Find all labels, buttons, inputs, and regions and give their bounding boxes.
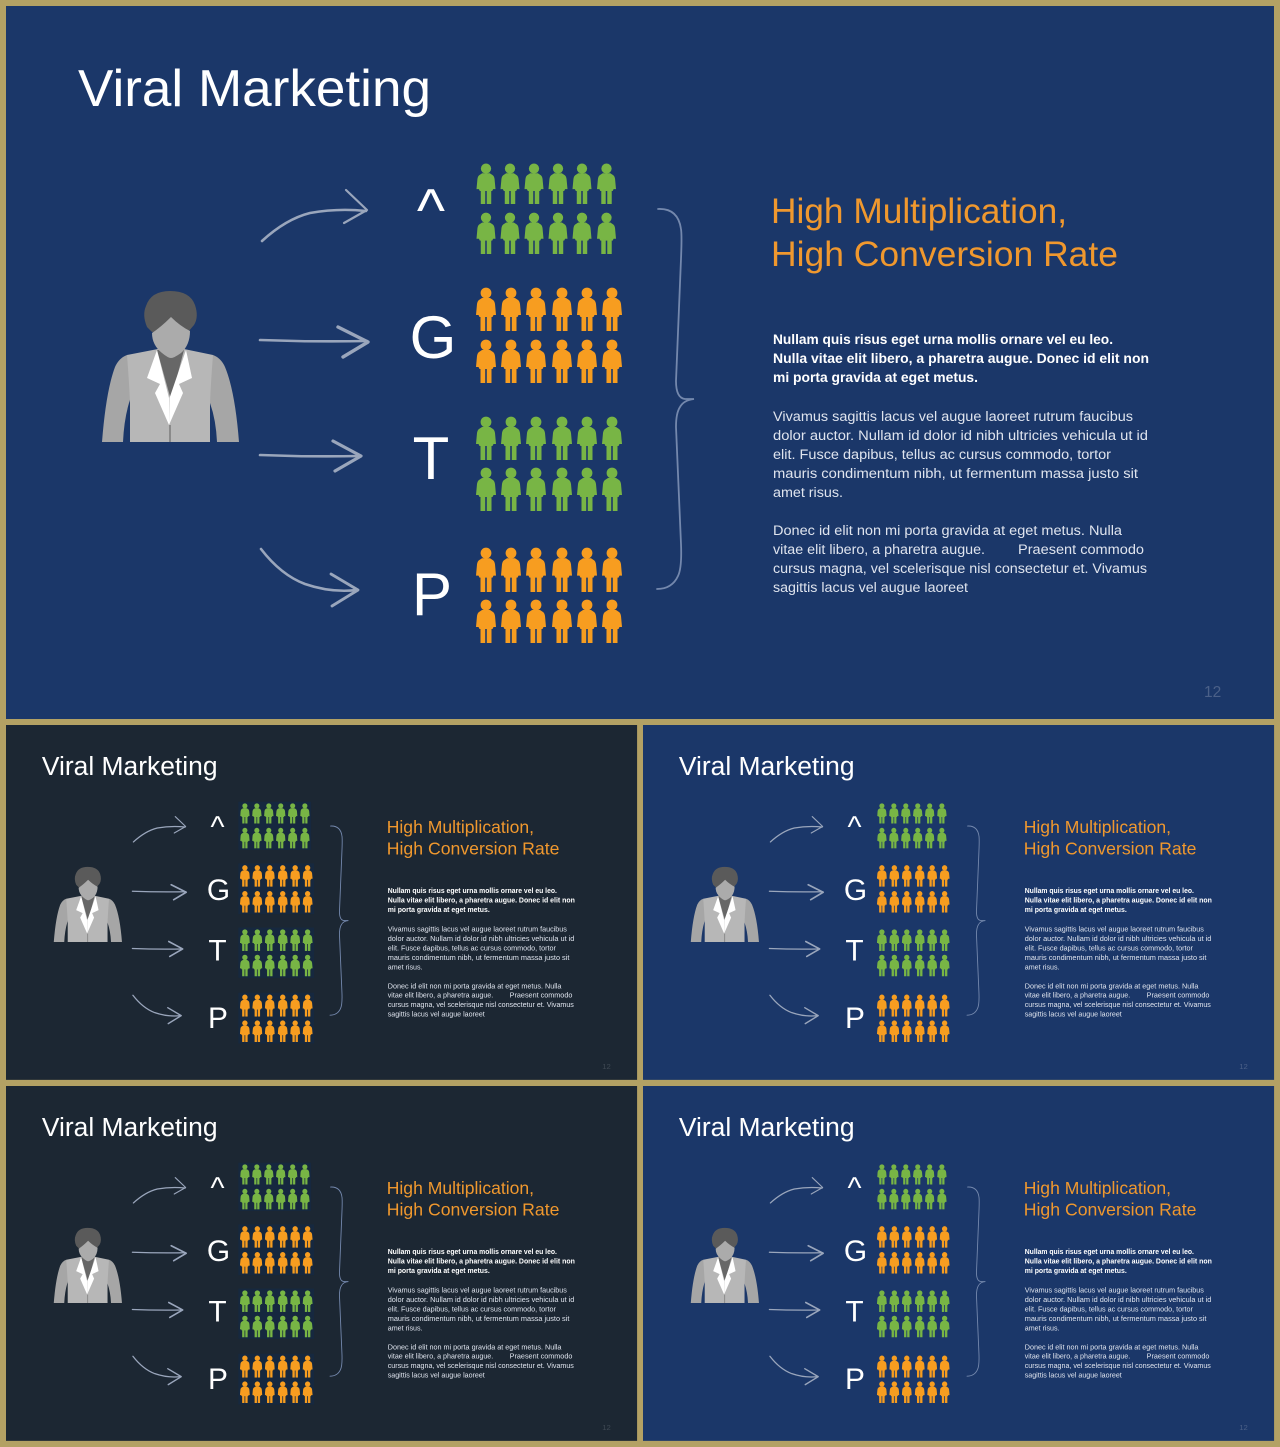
heading: High Conversion Rate bbox=[771, 235, 1118, 274]
letter: caret: ^ bbox=[417, 177, 445, 244]
heading bbox=[387, 817, 559, 858]
panel: dark slide bottom left bbox=[6, 1086, 637, 1441]
letter: G: G bbox=[844, 1235, 867, 1268]
heading: High Multiplication, bbox=[387, 1178, 534, 1198]
body paragraph 1: amet risus. bbox=[773, 485, 843, 501]
body paragraph 1: elit. Fusce dapibus, tellus ac cursus commodo, tortor bbox=[1025, 945, 1194, 952]
brace bbox=[967, 826, 985, 1015]
bold paragraph: mi porta gravida at eget metus. bbox=[1025, 1268, 1127, 1275]
pictogram group: P row bbox=[240, 1356, 313, 1403]
heading: High Multiplication, bbox=[771, 192, 1067, 231]
bold paragraph: Nulla vitae elit libero, a pharetra augue. Donec id elit non bbox=[388, 898, 575, 905]
bold paragraph: mi porta gravida at eget metus. bbox=[388, 1268, 490, 1275]
heading: High Conversion Rate bbox=[387, 838, 559, 858]
body paragraph 1: elit. Fusce dapibus, tellus ac cursus commodo, tortor bbox=[388, 1306, 557, 1313]
letter: T: T bbox=[845, 1295, 864, 1328]
bold paragraph bbox=[1025, 1249, 1212, 1275]
arrows from person to letters bbox=[769, 817, 823, 1024]
brace bbox=[330, 826, 348, 1015]
bold paragraph: Nulla vitae elit libero, a pharetra augue. Donec id elit non bbox=[1025, 1259, 1212, 1266]
bold paragraph: Nullam quis risus eget urna mollis ornare vel eu leo. bbox=[773, 332, 1113, 348]
icon: business person bbox=[691, 1228, 759, 1303]
pictogram group: P row bbox=[877, 1356, 950, 1403]
body paragraph 1: mauris condimentum nibh, ut fermentum massa justo sit bbox=[773, 466, 1138, 482]
bold paragraph: Nulla vitae elit libero, a pharetra augue. Donec id elit non bbox=[1025, 898, 1212, 905]
body paragraph 1: dolor auctor. Nullam id dolor id nibh ultricies vehicula ut id bbox=[1025, 936, 1211, 943]
pictogram group: G row bbox=[877, 1226, 950, 1274]
body paragraph 2: sagittis lacus vel augue laoreet bbox=[773, 580, 968, 596]
body paragraph 1: amet risus. bbox=[388, 964, 423, 971]
bold paragraph bbox=[388, 1249, 575, 1275]
title: Viral Marketing bbox=[78, 60, 431, 118]
bold paragraph bbox=[773, 332, 1149, 386]
pictogram group: T row bbox=[877, 1290, 950, 1337]
heading: High Multiplication, bbox=[1024, 1178, 1171, 1198]
panel: blue slide top right bbox=[643, 725, 1274, 1080]
icon: business person bbox=[691, 867, 759, 942]
body paragraph 1: Vivamus sagittis lacus vel augue laoreet rutrum faucibus bbox=[388, 927, 567, 934]
pictogram group: T row bbox=[240, 1290, 313, 1337]
arrows from person to letters bbox=[769, 1178, 823, 1385]
body paragraph 2: Donec id elit non mi porta gravida at eget metus. Nulla bbox=[1025, 983, 1199, 990]
pictogram group: T row bbox=[877, 929, 950, 976]
body paragraph 1: elit. Fusce dapibus, tellus ac cursus commodo, tortor bbox=[1025, 1306, 1194, 1313]
body paragraph 1 bbox=[388, 927, 574, 971]
pictogram group: G row bbox=[240, 1226, 313, 1274]
letter: G: G bbox=[207, 874, 230, 907]
title: Viral Marketing bbox=[42, 753, 218, 781]
heading: High Multiplication, bbox=[387, 817, 534, 837]
letter: P: P bbox=[208, 1002, 228, 1035]
bold paragraph: Nullam quis risus eget urna mollis ornare vel eu leo. bbox=[1025, 1249, 1194, 1256]
body paragraph 1: Vivamus sagittis lacus vel augue laoreet rutrum faucibus bbox=[1025, 927, 1204, 934]
page number: 12 bbox=[602, 1062, 611, 1071]
body paragraph 2: Praesent commodo bbox=[1147, 993, 1209, 1000]
body paragraph 2: sagittis lacus vel augue laoreet bbox=[388, 1012, 485, 1019]
body paragraph 2: Donec id elit non mi porta gravida at eget metus. Nulla bbox=[773, 523, 1122, 539]
body paragraph 2 bbox=[773, 523, 1147, 596]
body paragraph 2: sagittis lacus vel augue laoreet bbox=[1025, 1012, 1122, 1019]
body paragraph 1: Vivamus sagittis lacus vel augue laoreet rutrum faucibus bbox=[1025, 1288, 1204, 1295]
body paragraph 1: dolor auctor. Nullam id dolor id nibh ultricies vehicula ut id bbox=[1025, 1297, 1211, 1304]
body paragraph 2: vitae elit libero, a pharetra augue. bbox=[388, 1354, 493, 1361]
panel: blue slide bottom right bbox=[643, 1086, 1274, 1441]
arrows from person to letters bbox=[260, 190, 368, 606]
body paragraph 1 bbox=[773, 409, 1148, 501]
body paragraph 2: cursus magna, vel scelerisque nisl consectetur et. Vivamus bbox=[388, 1363, 574, 1370]
body paragraph 1: elit. Fusce dapibus, tellus ac cursus commodo, tortor bbox=[388, 945, 557, 952]
arrows from person to letters bbox=[132, 1178, 186, 1385]
body paragraph 2: cursus magna, vel scelerisque nisl consectetur et. Vivamus bbox=[1025, 1002, 1211, 1009]
body paragraph 1: Vivamus sagittis lacus vel augue laoreet rutrum faucibus bbox=[773, 409, 1133, 425]
bold paragraph: Nullam quis risus eget urna mollis ornare vel eu leo. bbox=[388, 888, 557, 895]
body paragraph 1: dolor auctor. Nullam id dolor id nibh ultricies vehicula ut id bbox=[388, 1297, 574, 1304]
heading bbox=[387, 1178, 559, 1219]
heading bbox=[771, 192, 1118, 274]
arrows from person to letters bbox=[132, 817, 186, 1024]
body paragraph 2: vitae elit libero, a pharetra augue. bbox=[773, 542, 985, 558]
letter: G: G bbox=[410, 304, 456, 371]
pictogram group: caret row bbox=[240, 1164, 310, 1209]
body paragraph 2: sagittis lacus vel augue laoreet bbox=[1025, 1373, 1122, 1380]
page number: 12 bbox=[1239, 1423, 1248, 1432]
pictogram group: P row bbox=[476, 548, 622, 643]
body paragraph 2 bbox=[388, 1344, 574, 1380]
body paragraph 2: cursus magna, vel scelerisque nisl consectetur et. Vivamus bbox=[388, 1002, 574, 1009]
letter: P: P bbox=[412, 561, 452, 628]
body paragraph 2 bbox=[1025, 1344, 1211, 1380]
bold paragraph: mi porta gravida at eget metus. bbox=[388, 907, 490, 914]
body paragraph 2: Donec id elit non mi porta gravida at eget metus. Nulla bbox=[1025, 1344, 1199, 1351]
heading: High Conversion Rate bbox=[387, 1199, 559, 1219]
body paragraph 2: Praesent commodo bbox=[510, 1354, 572, 1361]
letter: P: P bbox=[208, 1363, 228, 1396]
body paragraph 1: dolor auctor. Nullam id dolor id nibh ultricies vehicula ut id bbox=[773, 428, 1148, 444]
body paragraph 1: mauris condimentum nibh, ut fermentum massa justo sit bbox=[388, 1316, 569, 1323]
body paragraph 2: Praesent commodo bbox=[1018, 542, 1144, 558]
body paragraph 2: Donec id elit non mi porta gravida at eget metus. Nulla bbox=[388, 983, 562, 990]
letter: T: T bbox=[208, 1295, 227, 1328]
brace bbox=[330, 1187, 348, 1376]
body paragraph 2: vitae elit libero, a pharetra augue. bbox=[388, 993, 493, 1000]
pictogram group: T row bbox=[476, 417, 622, 511]
body paragraph 2 bbox=[1025, 983, 1211, 1019]
title: Viral Marketing bbox=[679, 753, 855, 781]
letter: T: T bbox=[208, 934, 227, 967]
icon: business person bbox=[102, 291, 239, 442]
pictogram group: G row bbox=[476, 288, 622, 383]
body paragraph 2: Praesent commodo bbox=[510, 993, 572, 1000]
bold paragraph: Nulla vitae elit libero, a pharetra augue. Donec id elit non bbox=[773, 351, 1149, 367]
page number: 12 bbox=[602, 1423, 611, 1432]
pictogram group: G row bbox=[240, 865, 313, 913]
icon: business person bbox=[54, 867, 122, 942]
pictogram group: caret row bbox=[877, 1164, 947, 1209]
bold paragraph: Nullam quis risus eget urna mollis ornare vel eu leo. bbox=[1025, 888, 1194, 895]
body paragraph 1: amet risus. bbox=[388, 1325, 423, 1332]
bold paragraph: Nulla vitae elit libero, a pharetra augue. Donec id elit non bbox=[388, 1259, 575, 1266]
page number: 12 bbox=[1239, 1062, 1248, 1071]
pictogram group: T row bbox=[240, 929, 313, 976]
panel: dark slide top left bbox=[6, 725, 637, 1080]
body paragraph 1: amet risus. bbox=[1025, 1325, 1060, 1332]
page number: 12 bbox=[1204, 684, 1221, 701]
body paragraph 1: Vivamus sagittis lacus vel augue laoreet rutrum faucibus bbox=[388, 1288, 567, 1295]
body paragraph 2: Donec id elit non mi porta gravida at eget metus. Nulla bbox=[388, 1344, 562, 1351]
body paragraph 1: amet risus. bbox=[1025, 964, 1060, 971]
letter: P: P bbox=[845, 1363, 865, 1396]
letter: P: P bbox=[845, 1002, 865, 1035]
letter: T: T bbox=[413, 425, 449, 492]
bold paragraph bbox=[388, 888, 575, 914]
letter: caret: ^ bbox=[848, 811, 862, 844]
body paragraph 1: dolor auctor. Nullam id dolor id nibh ultricies vehicula ut id bbox=[388, 936, 574, 943]
letter: T: T bbox=[845, 934, 864, 967]
body paragraph 2: vitae elit libero, a pharetra augue. bbox=[1025, 1354, 1130, 1361]
bold paragraph: Nullam quis risus eget urna mollis ornare vel eu leo. bbox=[388, 1249, 557, 1256]
brace bbox=[967, 1187, 985, 1376]
pictogram group: caret row bbox=[877, 803, 947, 848]
body paragraph 2: cursus magna, vel scelerisque nisl consectetur et. Vivamus bbox=[773, 561, 1147, 577]
bold paragraph bbox=[1025, 888, 1212, 914]
pictogram group: P row bbox=[877, 995, 950, 1042]
pictogram group: G row bbox=[877, 865, 950, 913]
body paragraph 1: mauris condimentum nibh, ut fermentum massa justo sit bbox=[388, 955, 569, 962]
letter: caret: ^ bbox=[211, 1172, 225, 1205]
body paragraph 1 bbox=[388, 1288, 574, 1332]
letter: G: G bbox=[844, 874, 867, 907]
bold paragraph: mi porta gravida at eget metus. bbox=[773, 370, 978, 386]
title: Viral Marketing bbox=[42, 1114, 218, 1142]
body paragraph 2: vitae elit libero, a pharetra augue. bbox=[1025, 993, 1130, 1000]
heading bbox=[1024, 817, 1196, 858]
body paragraph 2 bbox=[388, 983, 574, 1019]
letter: caret: ^ bbox=[211, 811, 225, 844]
body paragraph 1: mauris condimentum nibh, ut fermentum massa justo sit bbox=[1025, 1316, 1206, 1323]
heading: High Multiplication, bbox=[1024, 817, 1171, 837]
brace bbox=[657, 209, 694, 589]
title: Viral Marketing bbox=[679, 1114, 855, 1142]
bold paragraph: mi porta gravida at eget metus. bbox=[1025, 907, 1127, 914]
pictogram group: caret row bbox=[240, 803, 310, 848]
heading: High Conversion Rate bbox=[1024, 838, 1196, 858]
pictogram group: P row bbox=[240, 995, 313, 1042]
body paragraph 1 bbox=[1025, 1288, 1211, 1332]
body paragraph 2: Praesent commodo bbox=[1147, 1354, 1209, 1361]
heading: High Conversion Rate bbox=[1024, 1199, 1196, 1219]
body paragraph 2: cursus magna, vel scelerisque nisl consectetur et. Vivamus bbox=[1025, 1363, 1211, 1370]
heading bbox=[1024, 1178, 1196, 1219]
letter: caret: ^ bbox=[848, 1172, 862, 1205]
icon: business person bbox=[54, 1228, 122, 1303]
body paragraph 1 bbox=[1025, 927, 1211, 971]
body paragraph 1: elit. Fusce dapibus, tellus ac cursus commodo, tortor bbox=[773, 447, 1111, 463]
letter: G: G bbox=[207, 1235, 230, 1268]
panel: main blue slide bbox=[6, 6, 1274, 719]
body paragraph 1: mauris condimentum nibh, ut fermentum massa justo sit bbox=[1025, 955, 1206, 962]
pictogram group: caret row bbox=[476, 164, 616, 254]
body paragraph 2: sagittis lacus vel augue laoreet bbox=[388, 1373, 485, 1380]
